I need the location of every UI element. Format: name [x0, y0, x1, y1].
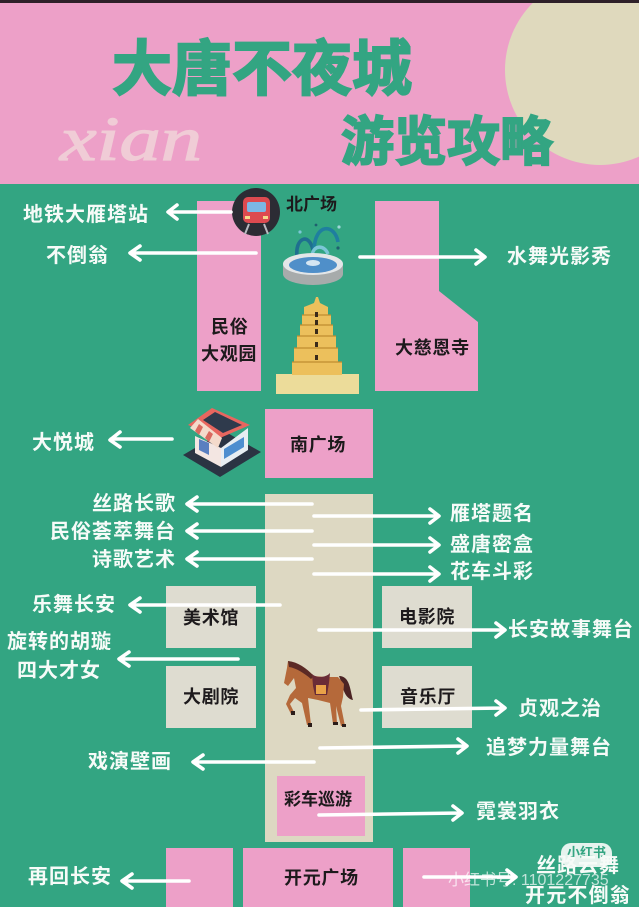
block: 南广场: 南广场	[290, 435, 346, 455]
right-side labels: 追梦力量舞台	[486, 735, 612, 759]
block: 民俗大观园	[197, 201, 261, 391]
script word xian: xian	[59, 105, 202, 174]
icon: horse	[284, 661, 353, 727]
left-side labels: 诗歌艺术	[92, 548, 176, 571]
left-side labels: 大悦城	[32, 431, 95, 454]
block: 大慈恩寺	[375, 201, 478, 391]
right-side labels: 霓裳羽衣	[476, 799, 560, 823]
left-side labels	[7, 203, 176, 888]
header banner	[0, 0, 639, 184]
right-side labels: 盛唐密盒	[450, 532, 534, 556]
watermark id text: 小红书号: 1101227735	[448, 871, 609, 889]
block: 开元广场: 开元广场	[284, 868, 359, 888]
right-side labels: 雁塔题名	[450, 502, 534, 525]
block: 大慈恩寺: 大慈恩寺	[395, 337, 470, 358]
right-side labels: 开元不倒翁	[525, 884, 631, 907]
left-side labels: 丝路长歌	[92, 492, 176, 515]
block: 南广场	[265, 409, 373, 478]
left-side labels: 再回长安	[28, 865, 112, 888]
block: 大剧院	[166, 666, 256, 728]
block: 彩车巡游: 彩车巡游	[284, 789, 352, 809]
arrows	[110, 205, 516, 888]
right-side labels: 贞观之治	[518, 696, 602, 720]
block: 电影院: 电影院	[399, 606, 455, 627]
left-side labels: 地铁大雁塔站	[23, 203, 149, 226]
title: 大唐不夜城	[112, 36, 412, 103]
left-side labels: 不倒翁	[46, 244, 109, 267]
left-side labels: 四大才女	[17, 659, 101, 682]
left-side labels: 乐舞长安	[32, 593, 116, 616]
icon: big wild goose pagoda	[276, 297, 359, 394]
label: 北广场: 北广场	[286, 195, 337, 214]
icon: shop	[183, 408, 261, 477]
left-side labels: 旋转的胡璇	[7, 630, 112, 653]
block: 音乐厅: 音乐厅	[400, 686, 456, 707]
watermark logo: 小红书	[561, 843, 612, 867]
left-side labels: 戏演壁画	[88, 749, 172, 773]
right-side labels: 花车斗彩	[450, 559, 534, 583]
block: 大剧院: 大剧院	[183, 686, 239, 707]
subtitle: 游览攻略	[341, 113, 553, 172]
block: 音乐厅	[382, 666, 472, 728]
central promenade	[265, 494, 373, 842]
block: 民俗大观园: 大观园	[201, 344, 257, 364]
icon: metro train	[232, 188, 280, 236]
block: 美术馆	[166, 586, 256, 648]
right-side labels: 水舞光影秀	[507, 245, 612, 268]
cream circle	[505, 0, 639, 165]
block: 电影院	[382, 586, 472, 648]
right-side labels	[450, 245, 634, 907]
left-side labels: 民俗荟萃舞台	[50, 519, 176, 543]
block: 彩车巡游	[277, 776, 365, 836]
block: 美术馆: 美术馆	[183, 607, 239, 628]
block: 开元广场	[166, 848, 470, 907]
right-side labels: 丝路云舞	[536, 854, 620, 877]
watermark logo: 小红书: 小红书	[567, 845, 606, 860]
right-side labels: 长安故事舞台	[508, 617, 634, 641]
icon: fountain	[283, 224, 343, 285]
block: 民俗大观园: 民俗	[211, 317, 248, 337]
